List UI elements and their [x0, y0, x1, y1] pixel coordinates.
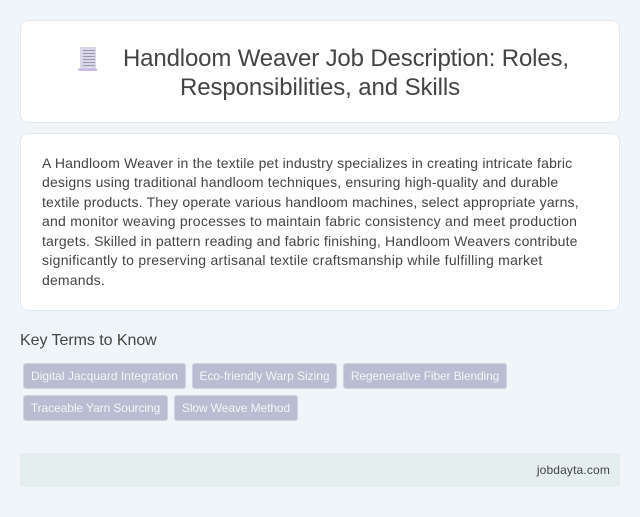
- heading: key terms: Key Terms to Know: [20, 332, 157, 349]
- description text: targets. Skilled in pattern reading and fabric finishing, Handloom Weavers contribute: [42, 233, 578, 249]
- icon: document scroll: [78, 47, 97, 71]
- tag: [23, 395, 168, 421]
- description panel: [20, 133, 620, 311]
- tag: Regenerative Fiber Blending: [351, 369, 499, 383]
- description text: significantly to preserving artisanal textile craftsmanship while fulfilling market: [42, 252, 543, 268]
- key terms tags: [23, 363, 507, 421]
- footer bar: [20, 453, 620, 487]
- tag: Traceable Yarn Sourcing: [31, 401, 160, 415]
- description text: [42, 155, 579, 288]
- header panel: [20, 20, 620, 123]
- tag: Eco-friendly Warp Sizing: [200, 369, 329, 383]
- tag: [174, 395, 298, 421]
- footer source text: jobdayta.com: [537, 463, 610, 477]
- description text: and monitor weaving processes to maintain fabric consistency and meet production: [42, 213, 577, 229]
- tag: [343, 363, 507, 389]
- description text: designs using traditional handloom techniques, ensuring high-quality and durable: [42, 174, 558, 190]
- tag: Digital Jacquard Integration: [31, 369, 178, 383]
- tag: [192, 363, 337, 389]
- description text: A Handloom Weaver in the textile pet industry specializes in creating intricate fabric: [42, 155, 572, 171]
- tag: Slow Weave Method: [182, 401, 290, 415]
- tag: [23, 363, 186, 389]
- description text: demands.: [42, 272, 105, 288]
- title: [123, 45, 569, 101]
- description text: textile products. They operate various handloom machines, select appropriate yarns,: [42, 194, 579, 210]
- title: Responsibilities, and Skills: [180, 74, 460, 101]
- title: Handloom Weaver Job Description: Roles,: [123, 45, 569, 72]
